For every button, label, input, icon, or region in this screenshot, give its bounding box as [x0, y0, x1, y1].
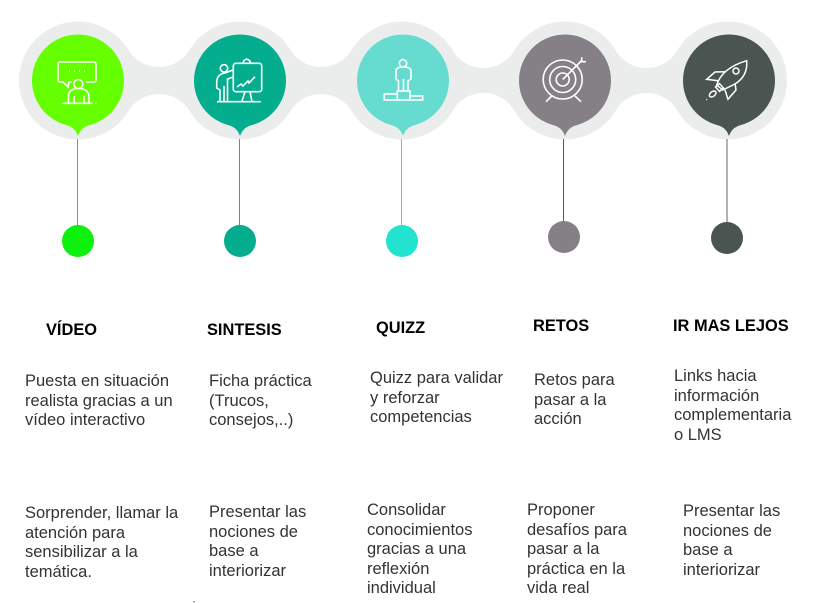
text: video goal: Sorprender, llamar la	[25, 504, 178, 522]
heading: sintesis: SINTESIS	[207, 321, 282, 339]
step 5 marker: ir mas lejos	[683, 34, 775, 254]
text: ir mas lejos goal: nociones de	[683, 522, 772, 540]
text: retos goal: pasar a la	[527, 540, 599, 558]
heading: quizz: QUIZZ	[376, 319, 425, 337]
icon: person with speech bubble	[58, 62, 96, 103]
text: sintesis description: (Trucos,	[209, 392, 269, 410]
text: ir mas lejos goal	[683, 502, 780, 578]
text: retos goal: vida real	[527, 579, 589, 597]
text: video description: realista gracias a un	[25, 392, 173, 410]
heading: ir mas lejos: IR MAS LEJOS	[673, 317, 789, 335]
text: sintesis description	[209, 372, 312, 429]
text: sintesis description: consejos,..)	[209, 411, 293, 429]
text: quizz goal: Consolidar	[367, 501, 446, 519]
grey connected band	[19, 22, 787, 140]
text: ir mas lejos description: o LMS	[674, 426, 722, 444]
text: sintesis goal: base a	[209, 542, 259, 560]
icon: rocket	[706, 61, 747, 100]
text: video goal: atención para	[25, 524, 125, 542]
text: retos description: pasar a la	[534, 390, 606, 408]
text: retos goal: desafíos para	[527, 520, 627, 538]
text: retos description	[534, 371, 615, 428]
text: quizz description: Quizz para validar	[370, 369, 503, 387]
text: ir mas lejos description: información	[674, 386, 759, 404]
text: retos description: Retos para	[534, 371, 615, 389]
text: ir mas lejos description	[674, 367, 792, 444]
text: sintesis goal	[209, 503, 306, 580]
text: ir mas lejos description: complementaria	[674, 406, 791, 424]
heading: video: VÍDEO	[46, 321, 97, 339]
text: retos goal: práctica en la	[527, 560, 625, 578]
text: quizz goal: individual	[367, 579, 436, 597]
text: video goal: temática.	[25, 562, 92, 580]
text: sintesis description: Ficha práctica	[209, 372, 312, 390]
text: video goal	[25, 504, 178, 580]
text: retos goal: Proponer	[527, 501, 595, 519]
text: quizz goal: reflexión	[367, 560, 429, 578]
text: retos description: acción	[534, 410, 582, 428]
text: video goal: sensibilizar a la	[25, 543, 138, 561]
step 4 marker: retos	[519, 34, 611, 253]
text: ir mas lejos description: Links hacia	[674, 367, 757, 385]
text: quizz description	[370, 369, 503, 426]
text: sintesis goal: Presentar las	[209, 503, 306, 521]
text: retos goal	[527, 501, 627, 597]
stray dot	[194, 601, 195, 602]
text: ir mas lejos goal: Presentar las	[683, 502, 780, 520]
text: video description: vídeo interactivo	[25, 411, 145, 429]
icon: presenter with chart board	[217, 59, 262, 102]
heading: retos: RETOS	[533, 317, 589, 335]
step 3 marker: quizz	[357, 34, 449, 257]
text: quizz description: competencias	[370, 408, 472, 426]
text: sintesis goal: interiorizar	[209, 562, 286, 580]
text: video description	[25, 372, 173, 429]
step 1 marker: video	[32, 34, 124, 257]
text: quizz goal: conocimientos	[367, 520, 472, 538]
icon: person on podium	[384, 60, 423, 100]
text: ir mas lejos goal: interiorizar	[683, 560, 760, 578]
text: quizz goal	[367, 501, 472, 597]
text: quizz goal: gracias a una	[367, 540, 466, 558]
icon: target with arrow	[543, 57, 586, 102]
text: video description: Puesta en situación	[25, 372, 169, 390]
text: sintesis goal: nociones de	[209, 522, 298, 540]
text: ir mas lejos goal: base a	[683, 541, 733, 559]
step 2 marker: sintesis	[194, 34, 286, 257]
text: quizz description: y reforzar	[370, 388, 440, 406]
